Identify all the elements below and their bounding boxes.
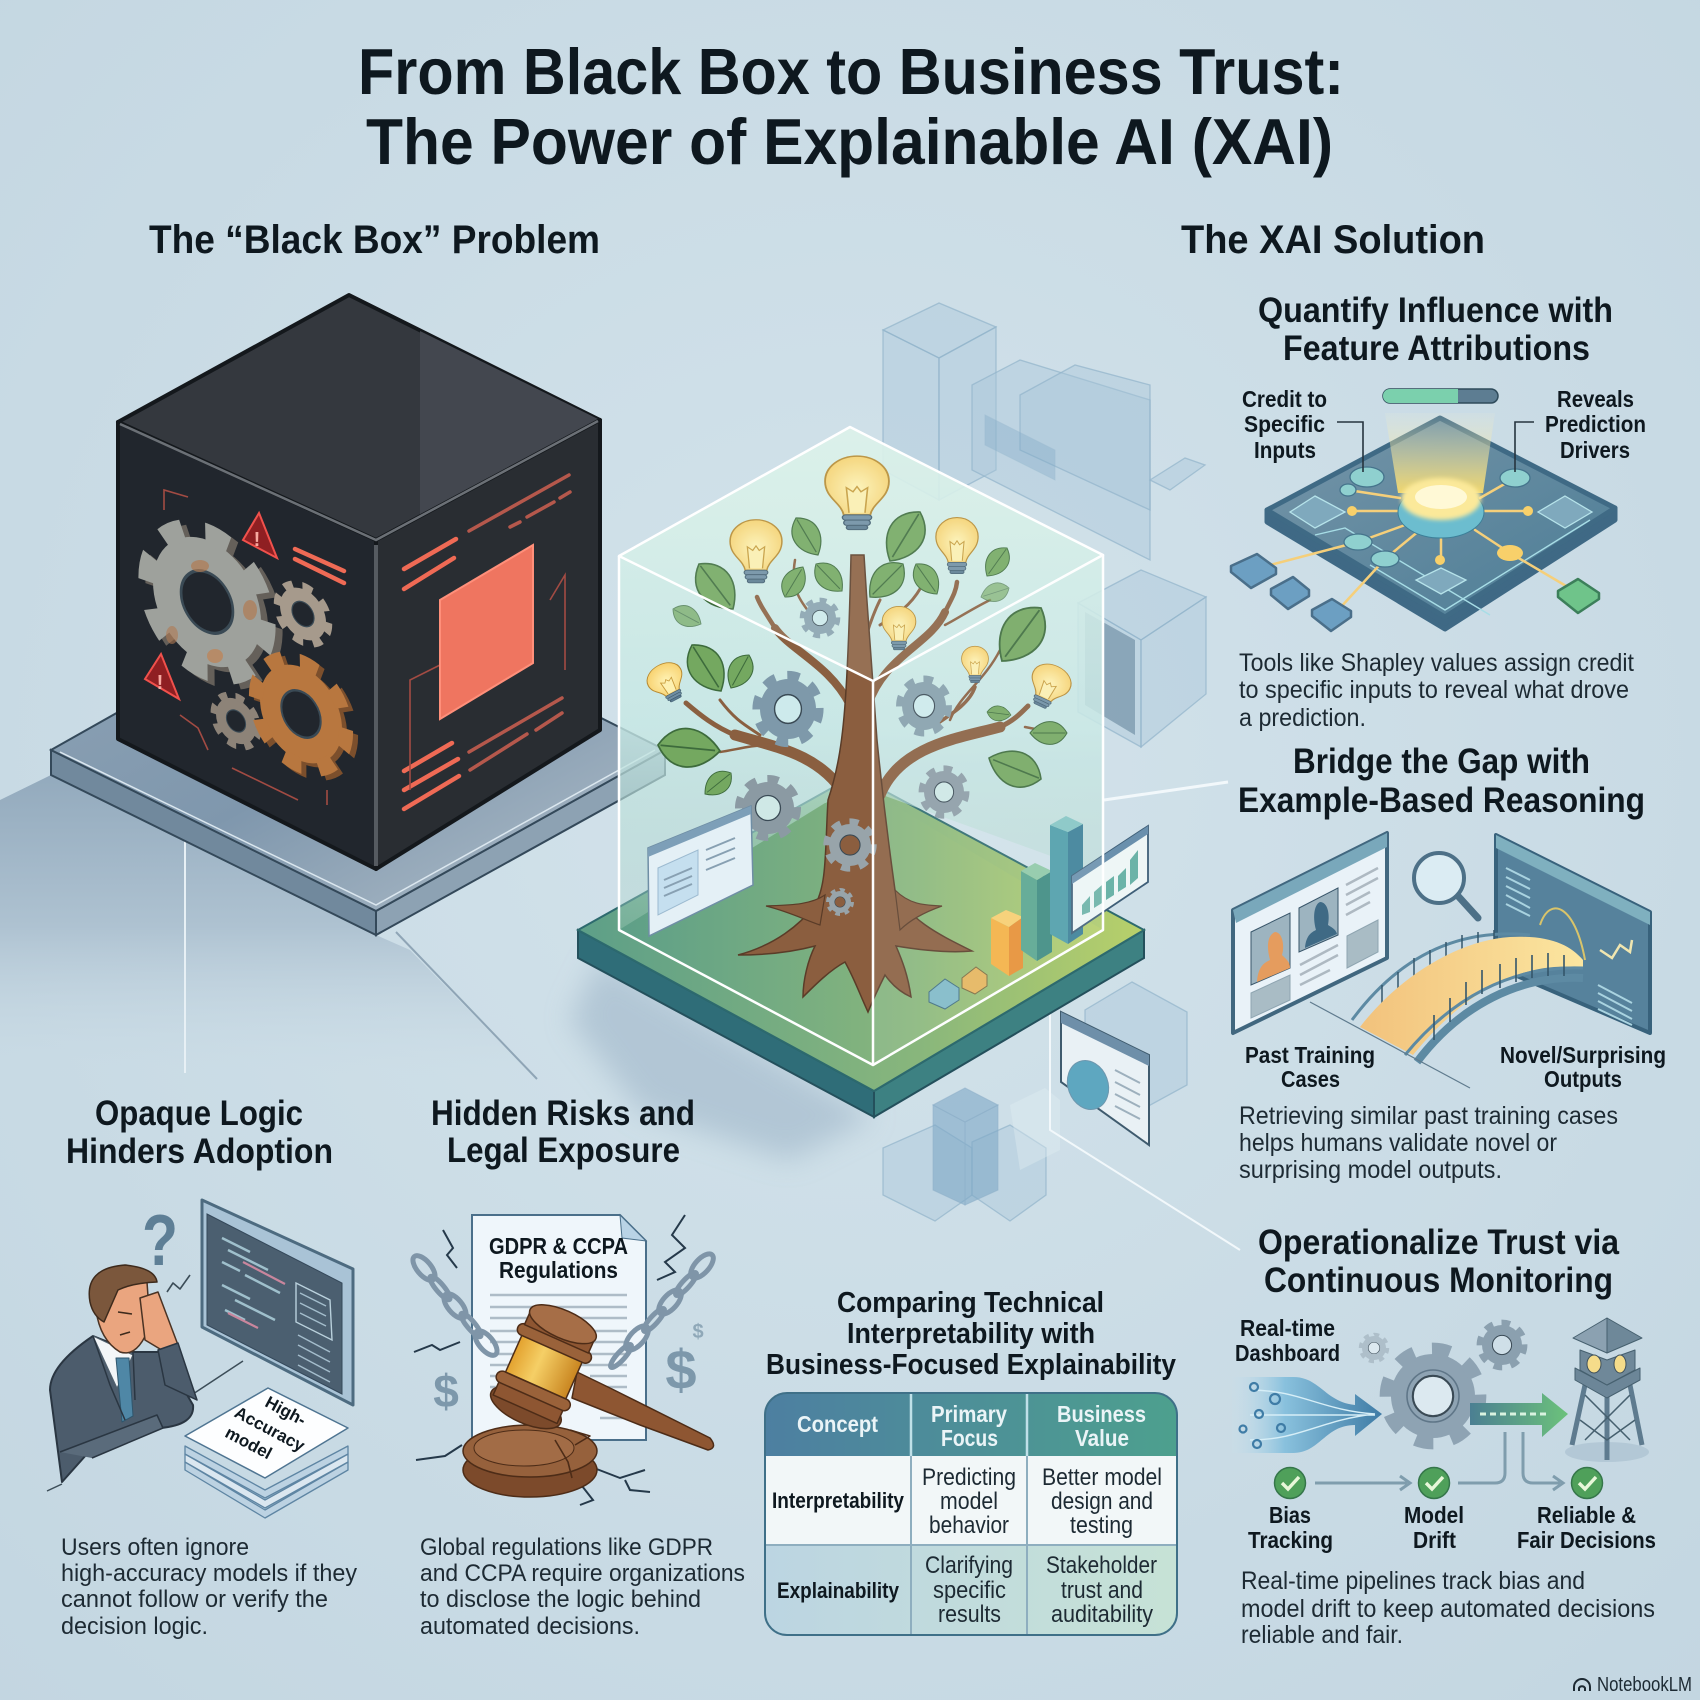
heading (1258, 291, 1613, 368)
high-accuracy model papers: Accuracy (231, 1403, 308, 1456)
glass front edges (619, 427, 1103, 1065)
translucent background structures (883, 303, 1206, 1221)
label: reveals prediction drivers: Prediction (1545, 411, 1646, 437)
heading: the XAI solution: The XAI Solution (1181, 218, 1485, 262)
dollar signs: $ (433, 1365, 459, 1417)
chains (409, 1250, 717, 1370)
heading: Example-Based Reasoning (1238, 781, 1645, 820)
dollar signs: $ (692, 1321, 704, 1343)
illustration: transparent tree cube (578, 427, 1148, 1117)
dashboard label (1235, 1315, 1340, 1366)
header row: Concept (797, 1411, 878, 1437)
row: interpretability: Interpretability (772, 1488, 905, 1513)
row: interpretability: model (940, 1488, 998, 1515)
glass back walls (619, 427, 1103, 930)
header row: Primary (931, 1401, 1007, 1427)
base platform (578, 775, 1144, 1117)
novel outputs window (1496, 835, 1650, 1033)
row: interpretability: testing (1070, 1512, 1133, 1539)
heading: Legal Exposure (447, 1131, 680, 1170)
label: credit to specific inputs: Credit to (1242, 386, 1327, 412)
label: reveals prediction drivers (1515, 386, 1646, 472)
past cases window (1233, 833, 1387, 1033)
section: opaque logic (47, 1094, 357, 1640)
body text: and CCPA require organizations (420, 1560, 745, 1587)
tree base shadow (570, 958, 874, 1160)
body text: Real-time pipelines track bias and (1241, 1567, 1585, 1595)
dashboard label: Real-time (1240, 1315, 1335, 1341)
heading: Business-Focused Explainability (766, 1349, 1176, 1381)
white connector lines (185, 780, 1240, 1250)
body text (1239, 1102, 1618, 1184)
warning triangles: ! (157, 672, 163, 694)
data flow arrow (1232, 1377, 1382, 1453)
influence bar (1383, 389, 1498, 403)
body text (420, 1534, 745, 1640)
cube faces (118, 295, 600, 869)
labels (1245, 1042, 1666, 1092)
status labels: Fair Decisions (1517, 1527, 1656, 1553)
body text: Global regulations like GDPR (420, 1534, 713, 1561)
body text: surprising model outputs. (1239, 1156, 1502, 1184)
labels: Outputs (1544, 1066, 1622, 1092)
regulation document (472, 1215, 646, 1440)
cracks and lightning (414, 1215, 685, 1505)
header row (797, 1401, 1146, 1451)
heading: Hidden Risks and (431, 1094, 695, 1133)
rusty gears (148, 512, 351, 786)
heading: Hinders Adoption (66, 1132, 333, 1171)
illustration: floating dashboard window (1061, 1012, 1149, 1145)
body text: model drift to keep automated decisions (1241, 1595, 1655, 1623)
right UI chart window (1072, 826, 1148, 933)
row: explainability: trust and (1061, 1577, 1143, 1604)
output arrow (1470, 1393, 1568, 1437)
regulation document: Regulations (499, 1257, 618, 1283)
labels: Cases (1281, 1066, 1340, 1092)
output chips (1231, 554, 1599, 631)
row: interpretability (772, 1464, 1162, 1539)
row: explainability: Clarifying (925, 1552, 1013, 1579)
heading: Continuous Monitoring (1264, 1261, 1613, 1300)
row: explainability: results (938, 1601, 1001, 1628)
body text: Tools like Shapley values assign credit (1239, 649, 1634, 677)
gavel (463, 1295, 714, 1497)
magnifier (1414, 853, 1478, 918)
heading: Feature Attributions (1283, 329, 1590, 368)
light bulbs (642, 456, 1076, 715)
body text: decision logic. (61, 1613, 208, 1640)
status labels (1248, 1502, 1656, 1553)
body text: automated decisions. (420, 1613, 640, 1640)
label: reveals prediction drivers: Drivers (1560, 437, 1630, 463)
section: quantify influence (1231, 291, 1646, 732)
row: interpretability: Predicting (922, 1464, 1016, 1491)
red circuit lines (164, 475, 570, 809)
heading: Bridge the Gap with (1293, 742, 1590, 781)
row: explainability: auditability (1051, 1601, 1153, 1628)
high-accuracy model papers (185, 1388, 348, 1518)
body text: a prediction. (1239, 704, 1366, 732)
status labels: Model (1404, 1502, 1464, 1528)
status labels: Drift (1413, 1527, 1456, 1553)
section: bridge the gap (1233, 742, 1666, 1184)
section: hidden risks (409, 1094, 745, 1640)
high-accuracy model papers: model (222, 1423, 275, 1463)
frustrated businessman (47, 1265, 243, 1491)
header row: Focus (941, 1425, 998, 1451)
heading (766, 1287, 1176, 1381)
status labels: Tracking (1248, 1527, 1333, 1553)
heading: Operationalize Trust via (1258, 1223, 1619, 1262)
table (765, 1393, 1177, 1635)
body text (1241, 1567, 1655, 1649)
header row: Value (1075, 1425, 1129, 1451)
body text: to disclose the logic behind (420, 1586, 701, 1613)
section: continuous monitoring (1232, 1223, 1656, 1649)
heading: Quantify Influence with (1258, 291, 1613, 330)
row: interpretability: design and (1051, 1488, 1153, 1515)
monitoring gears (1361, 1323, 1524, 1442)
label: credit to specific inputs (1242, 386, 1363, 472)
row: explainability: Explainability (777, 1578, 900, 1603)
body text: high-accuracy models if they (61, 1560, 357, 1587)
status labels: Bias (1269, 1502, 1311, 1528)
heading (431, 1094, 695, 1170)
dollar signs (433, 1321, 704, 1417)
label: credit to specific inputs: Specific (1244, 411, 1325, 437)
bridge (1310, 930, 1583, 1088)
trunk and branches (686, 560, 1060, 795)
row: interpretability: Better model (1042, 1464, 1162, 1491)
row: explainability: Stakeholder (1046, 1552, 1157, 1579)
dollar signs: $ (665, 1338, 697, 1401)
labels: Past Training (1245, 1042, 1375, 1068)
body text: cannot follow or verify the (61, 1586, 328, 1613)
section: comparison table (765, 1287, 1177, 1635)
row: explainability (777, 1552, 1157, 1628)
tree gears (739, 600, 966, 914)
warning triangles (145, 513, 277, 699)
bar chart (929, 816, 1083, 1009)
heading: the black box problem: The “Black Box” Problem (149, 218, 600, 262)
attribution plate (1267, 413, 1615, 629)
labels: Novel/Surprising (1500, 1042, 1666, 1068)
regulation document: GDPR & CCPA (489, 1233, 628, 1259)
heading: Opaque Logic (95, 1094, 303, 1133)
heading (66, 1094, 333, 1171)
heading: Interpretability with (847, 1318, 1095, 1350)
title: From Black Box to Business Trust: (358, 35, 1344, 108)
left UI window (648, 806, 753, 936)
status labels: Reliable & (1537, 1502, 1636, 1528)
illustration: black box (51, 295, 665, 935)
high-accuracy model papers: High- (262, 1393, 309, 1430)
body text (61, 1534, 357, 1640)
title (358, 35, 1344, 178)
body text: helps humans validate novel or (1239, 1129, 1557, 1157)
body text: Users often ignore (61, 1534, 249, 1561)
dashboard label: Dashboard (1235, 1340, 1340, 1366)
leaves (656, 503, 1067, 802)
body text: Retrieving similar past training cases (1239, 1102, 1618, 1130)
monitor with code (202, 1200, 353, 1405)
label: credit to specific inputs: Inputs (1254, 437, 1316, 463)
row: explainability: specific (933, 1577, 1006, 1604)
heading (1258, 1223, 1619, 1300)
watchtower (1565, 1318, 1649, 1462)
question mark: ? (142, 1201, 178, 1281)
warning triangles: ! (254, 529, 260, 551)
heading (1238, 742, 1645, 820)
status flow with checks (1274, 1432, 1602, 1498)
heading: Comparing Technical (837, 1287, 1104, 1319)
title: The Power of Explainable AI (XAI) (366, 105, 1333, 178)
body text: to specific inputs to reveal what drove (1239, 676, 1629, 704)
row: interpretability: behavior (929, 1512, 1009, 1539)
body text (1239, 649, 1634, 732)
platform (51, 587, 665, 935)
body text: reliable and fair. (1241, 1621, 1403, 1649)
header row: Business (1057, 1401, 1146, 1427)
cube shadow on floor (0, 775, 535, 1078)
label: reveals prediction drivers: Reveals (1557, 386, 1634, 412)
